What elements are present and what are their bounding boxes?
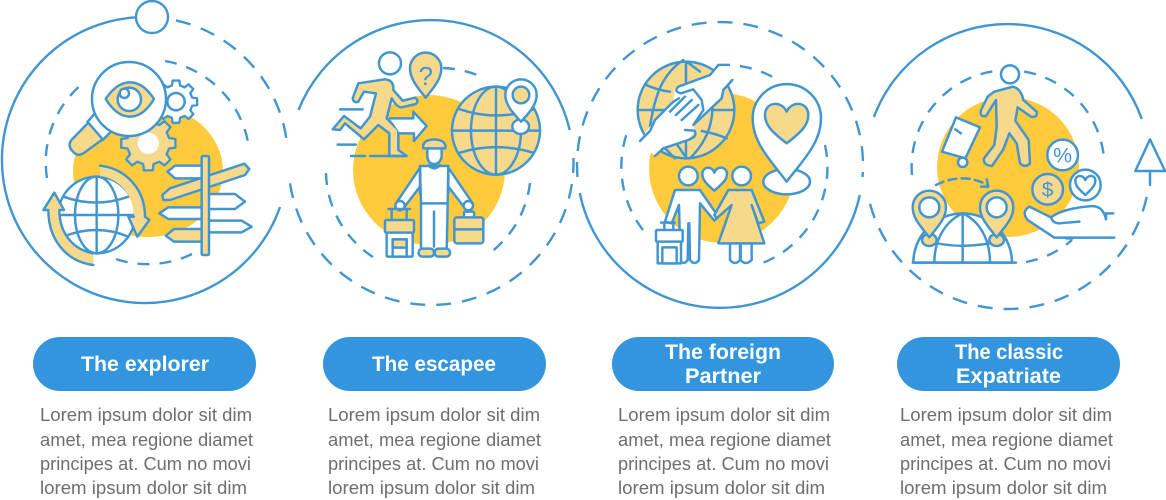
- body text 3: lorem ipsum dolor sit dim: [618, 477, 825, 498]
- pill: The foreign Partner: Partner: [685, 365, 761, 388]
- body text 2: [328, 404, 541, 498]
- icon: couple with suitcase: [656, 167, 764, 263]
- icon: heart location pin: [753, 84, 821, 194]
- outer ring 1: [2, 17, 287, 303]
- body text 4: Lorem ipsum dolor sit dim: [900, 404, 1112, 425]
- icon: coins over open hand: [1025, 140, 1114, 238]
- body text 2: lorem ipsum dolor sit dim: [328, 477, 535, 498]
- yellow blob 2: [353, 95, 505, 245]
- step marker circle: [136, 1, 168, 33]
- pill: The explorer: [33, 337, 256, 391]
- inner dashed ring 2: [326, 68, 530, 257]
- icon: globe with pin: [452, 79, 540, 175]
- outer ring 4: [869, 24, 1147, 309]
- body text 3: Lorem ipsum dolor sit dim: [618, 404, 830, 425]
- body text 3: principes at. Cum no movi: [618, 453, 829, 474]
- body text 2: principes at. Cum no movi: [328, 453, 539, 474]
- body text 3: [618, 404, 831, 498]
- icon: coins over open hand: $: [1042, 179, 1054, 202]
- outer ring 3: [577, 22, 863, 308]
- body text 4: lorem ipsum dolor sit dim: [900, 477, 1107, 498]
- icon: signpost: [159, 156, 252, 255]
- pill: The escapee: [323, 337, 546, 391]
- pill: The escapee: The escapee: [372, 353, 496, 376]
- pill: The foreign Partner: The foreign: [665, 341, 781, 364]
- body text 1: principes at. Cum no movi: [40, 453, 251, 474]
- icon: magnifier, eye and gears: [70, 62, 197, 170]
- inner dashed ring 4: [912, 70, 1104, 262]
- inner dashed ring 1: [46, 61, 249, 264]
- pill: The explorer: The explorer: [81, 353, 209, 376]
- body text 2: amet, mea regione diamet: [328, 429, 541, 450]
- pill: The foreign Partner: [612, 337, 834, 391]
- icon: coins over open hand: %: [1053, 144, 1072, 168]
- icon: walking person with suitcase: [942, 65, 1037, 167]
- arrow: direction triangle: [1135, 139, 1165, 185]
- pill: The classic Expatriate: Expatriate: [956, 365, 1061, 388]
- body text 3: amet, mea regione diamet: [618, 429, 831, 450]
- panel: the foreign partner: [577, 22, 863, 308]
- pill: The classic Expatriate: The classic: [955, 341, 1063, 364]
- yellow blob 4: [937, 97, 1079, 237]
- panel: the classic expatriate: [869, 24, 1165, 309]
- icon: running person: [333, 52, 427, 156]
- body text 4: principes at. Cum no movi: [900, 453, 1111, 474]
- icon: globe with two pins: [913, 178, 1016, 263]
- icon: question pin: [410, 53, 441, 98]
- icon: question pin: ?: [418, 61, 433, 91]
- body text 1: [40, 404, 253, 498]
- icon: globe with clasped hands: [638, 60, 734, 158]
- outer ring 2: [289, 20, 573, 305]
- inner dashed ring 3: [621, 65, 827, 264]
- body text 4: amet, mea regione diamet: [900, 429, 1113, 450]
- icon: globe with rotation arrows: [43, 166, 149, 265]
- pill: The classic Expatriate: [897, 337, 1120, 391]
- body text 1: amet, mea regione diamet: [40, 429, 253, 450]
- body text 1: lorem ipsum dolor sit dim: [40, 477, 247, 498]
- body text 1: Lorem ipsum dolor sit dim: [40, 404, 252, 425]
- body text 2: Lorem ipsum dolor sit dim: [328, 404, 540, 425]
- icon: traveller with luggage: [385, 139, 483, 257]
- body text 4: [900, 404, 1113, 498]
- yellow blob 1: [73, 105, 223, 237]
- panel: the escapee: [289, 20, 573, 305]
- yellow blob 3: [649, 93, 795, 243]
- panel: the explorer: [2, 1, 287, 303]
